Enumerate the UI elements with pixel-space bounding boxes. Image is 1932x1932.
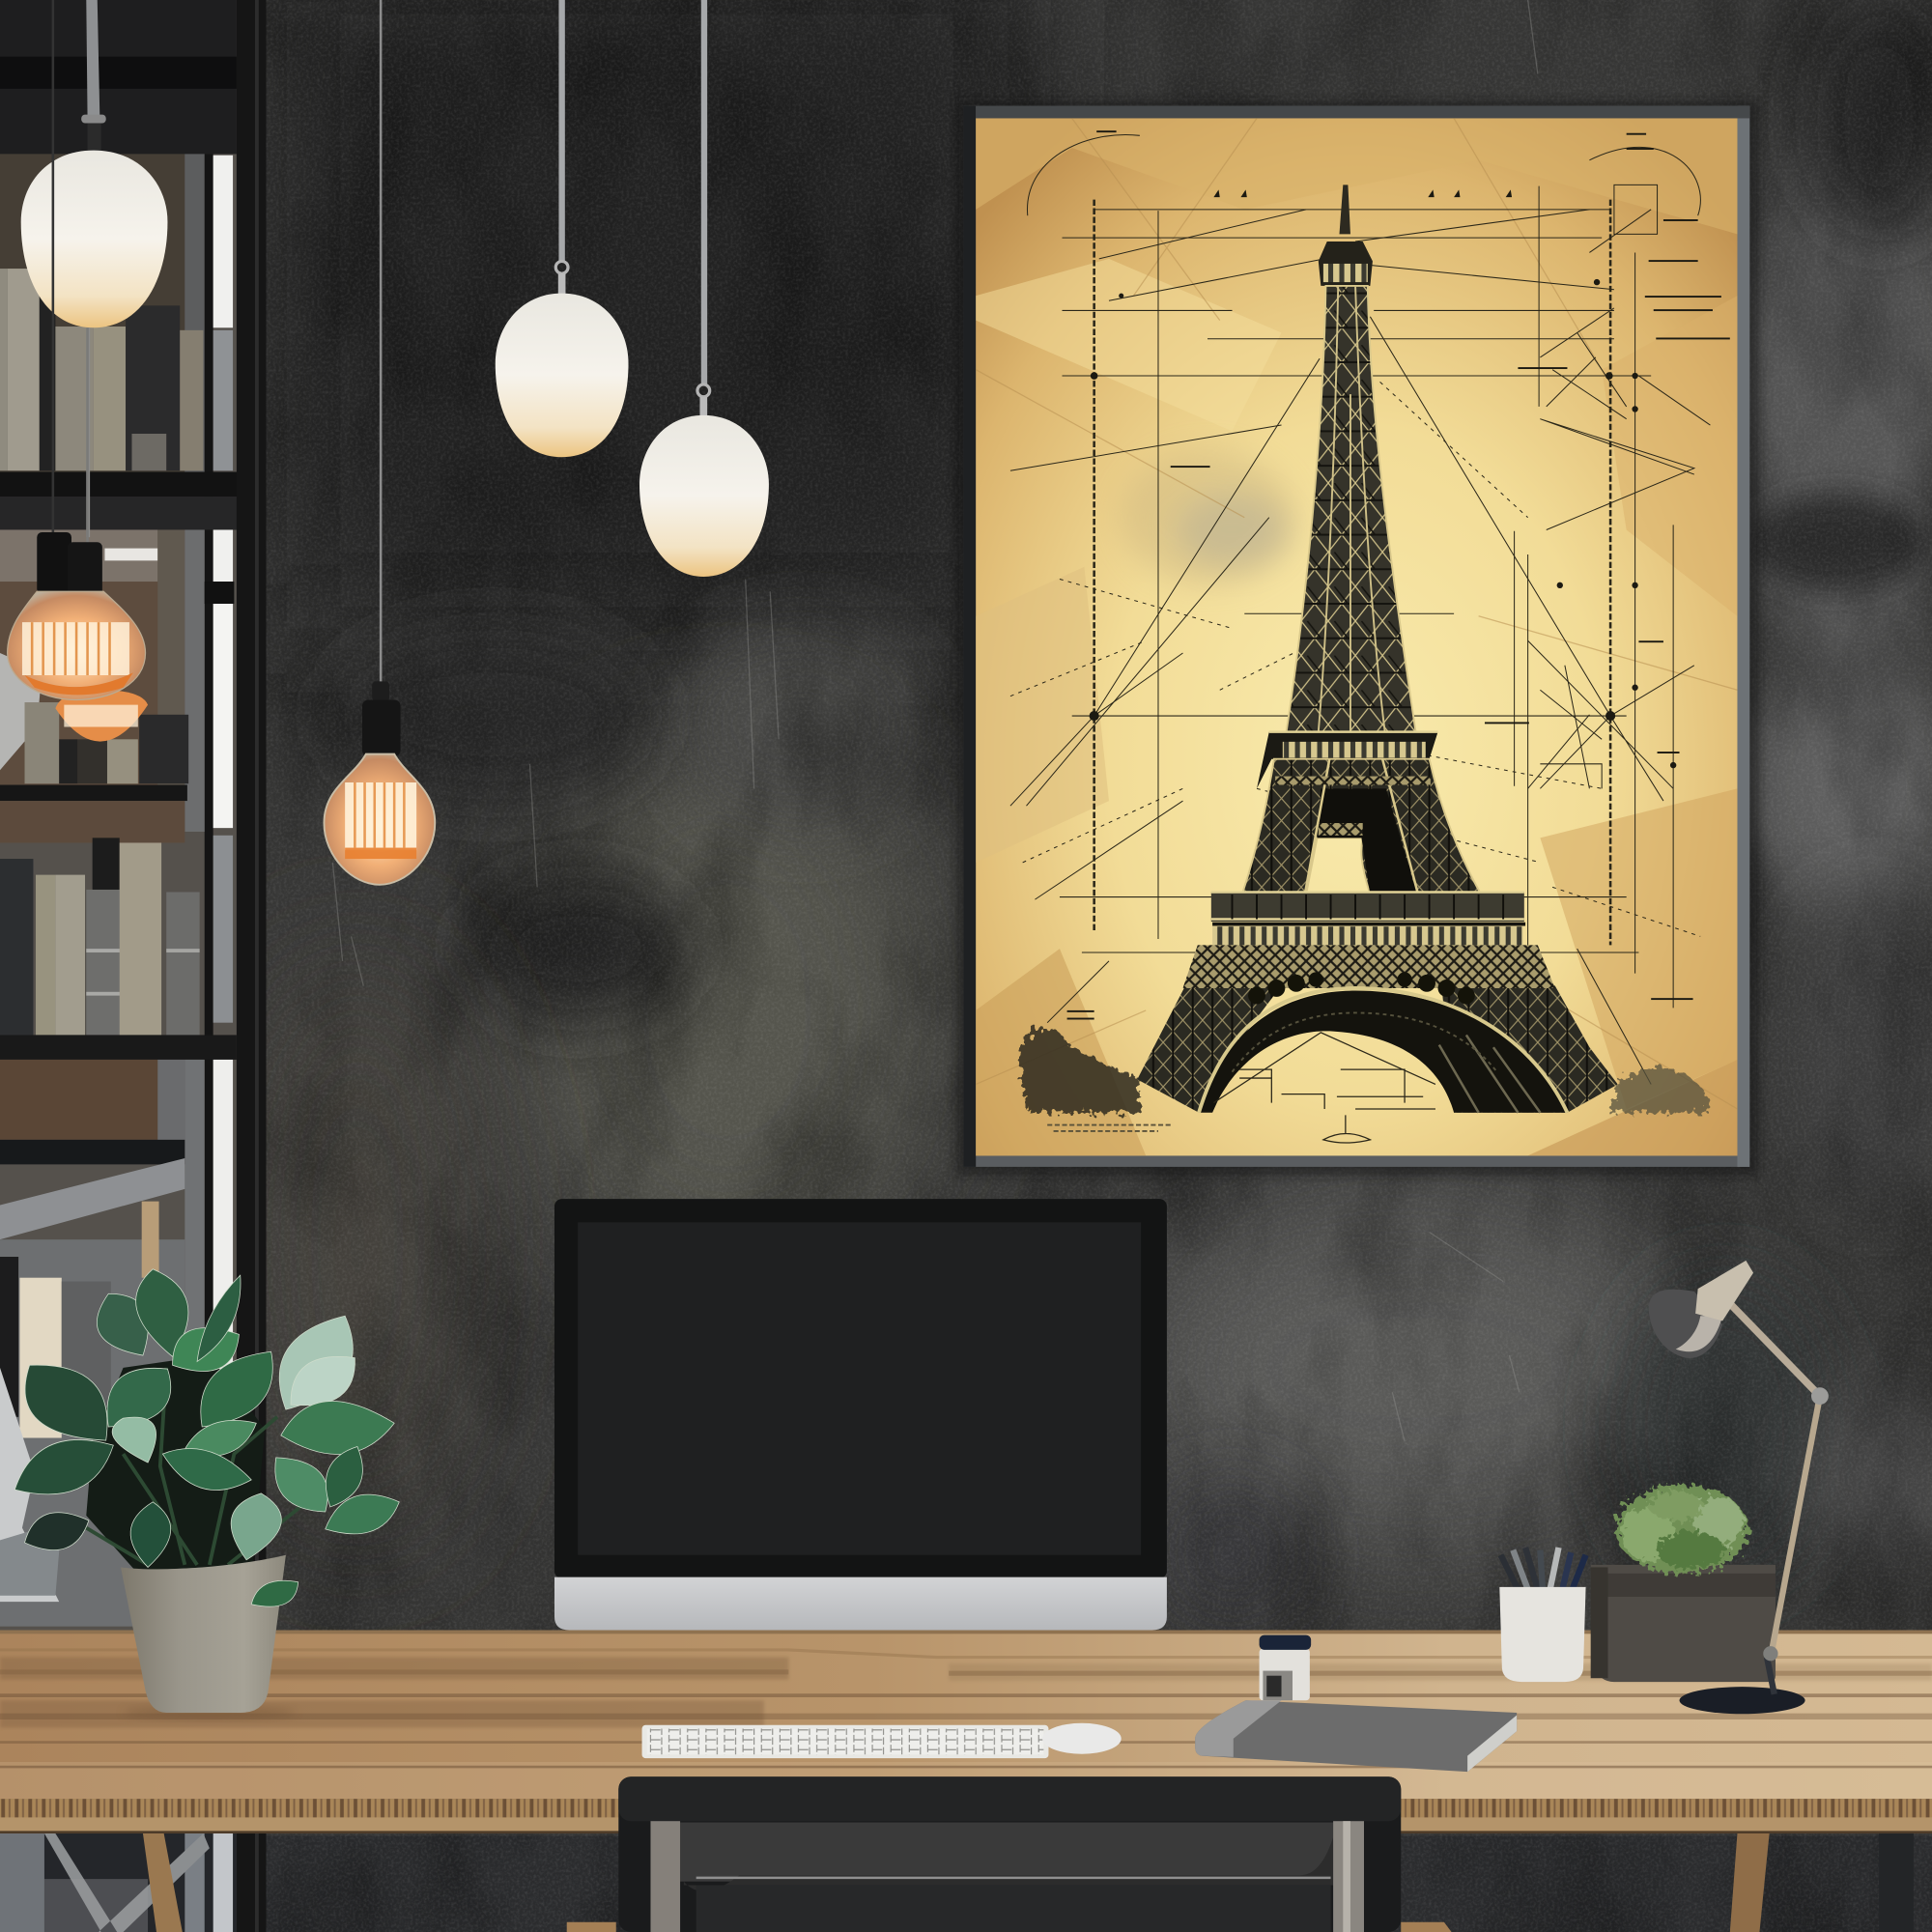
middle section lattice strip and gold legs	[1275, 759, 1431, 895]
lattice band under platform	[1182, 945, 1555, 988]
blueprint construction lines	[1010, 135, 1710, 1084]
stems	[86, 1368, 321, 1565]
monitor stand	[779, 1631, 944, 1721]
pendant lamp 3 with cord	[639, 0, 769, 577]
middle compartment	[0, 529, 234, 1023]
chair metal bars	[650, 1821, 1364, 1932]
middle arch opening shadow	[1318, 788, 1417, 895]
pendant lamp 2 with cord	[496, 0, 629, 457]
pendant lamp 1 with cord	[21, 0, 167, 537]
Edison bulb pendant	[324, 0, 435, 885]
computer monitor	[554, 1199, 1167, 1721]
main arch	[1199, 988, 1567, 1113]
screen	[578, 1222, 1141, 1555]
pencil cup	[1499, 1548, 1586, 1682]
shelf board three	[0, 784, 187, 842]
Eiffel Tower illustration	[1047, 185, 1618, 1143]
first platform	[1211, 892, 1525, 945]
upper compartment	[0, 154, 233, 1386]
framed poster	[956, 101, 1759, 1176]
desk front edge	[0, 1799, 1932, 1833]
shrub foliage	[1615, 1485, 1748, 1574]
antenna and top cabin	[1319, 185, 1373, 286]
middle tower section	[1242, 759, 1481, 895]
books row one	[0, 269, 203, 470]
tree sketches	[1020, 1028, 1709, 1113]
silver chin	[554, 1577, 1167, 1631]
shelf board two	[0, 472, 238, 529]
mouse	[1042, 1723, 1122, 1754]
upper tower section	[1287, 286, 1416, 732]
potted plant	[14, 1269, 399, 1719]
left base leg	[1137, 985, 1282, 1113]
wooden desk	[0, 1631, 1932, 1932]
Edison bulbs in shelf	[8, 327, 148, 742]
pot	[121, 1555, 286, 1713]
top shelf board	[0, 0, 237, 154]
small jar	[1260, 1635, 1311, 1700]
keyboard	[642, 1725, 1048, 1758]
bookshelf	[0, 0, 267, 1932]
second platform	[1257, 732, 1438, 788]
blueprint annotation marks and nodes	[1067, 130, 1730, 1019]
upper tower gold ribs	[1319, 286, 1385, 732]
shelf vertical frame	[237, 0, 267, 1932]
books row two	[0, 838, 200, 1035]
office chair	[618, 1776, 1401, 1932]
dark foliage mass	[86, 1355, 265, 1571]
leaves	[14, 1269, 399, 1606]
ground buildings sketch	[1213, 1033, 1435, 1143]
desk legs	[143, 1833, 1914, 1932]
notebook	[1195, 1700, 1517, 1772]
desk lamp	[1649, 1261, 1829, 1714]
shelf board four	[0, 1035, 237, 1060]
chair back pad	[680, 1822, 1337, 1932]
planter with shrub	[1591, 1485, 1776, 1682]
parchment	[976, 118, 1737, 1155]
lower compartment	[0, 1060, 233, 1627]
area under desk at shelf	[0, 1833, 237, 1932]
right base leg	[1441, 985, 1618, 1113]
ground hatch	[1047, 1125, 1171, 1131]
arch scallops	[1248, 972, 1475, 1005]
